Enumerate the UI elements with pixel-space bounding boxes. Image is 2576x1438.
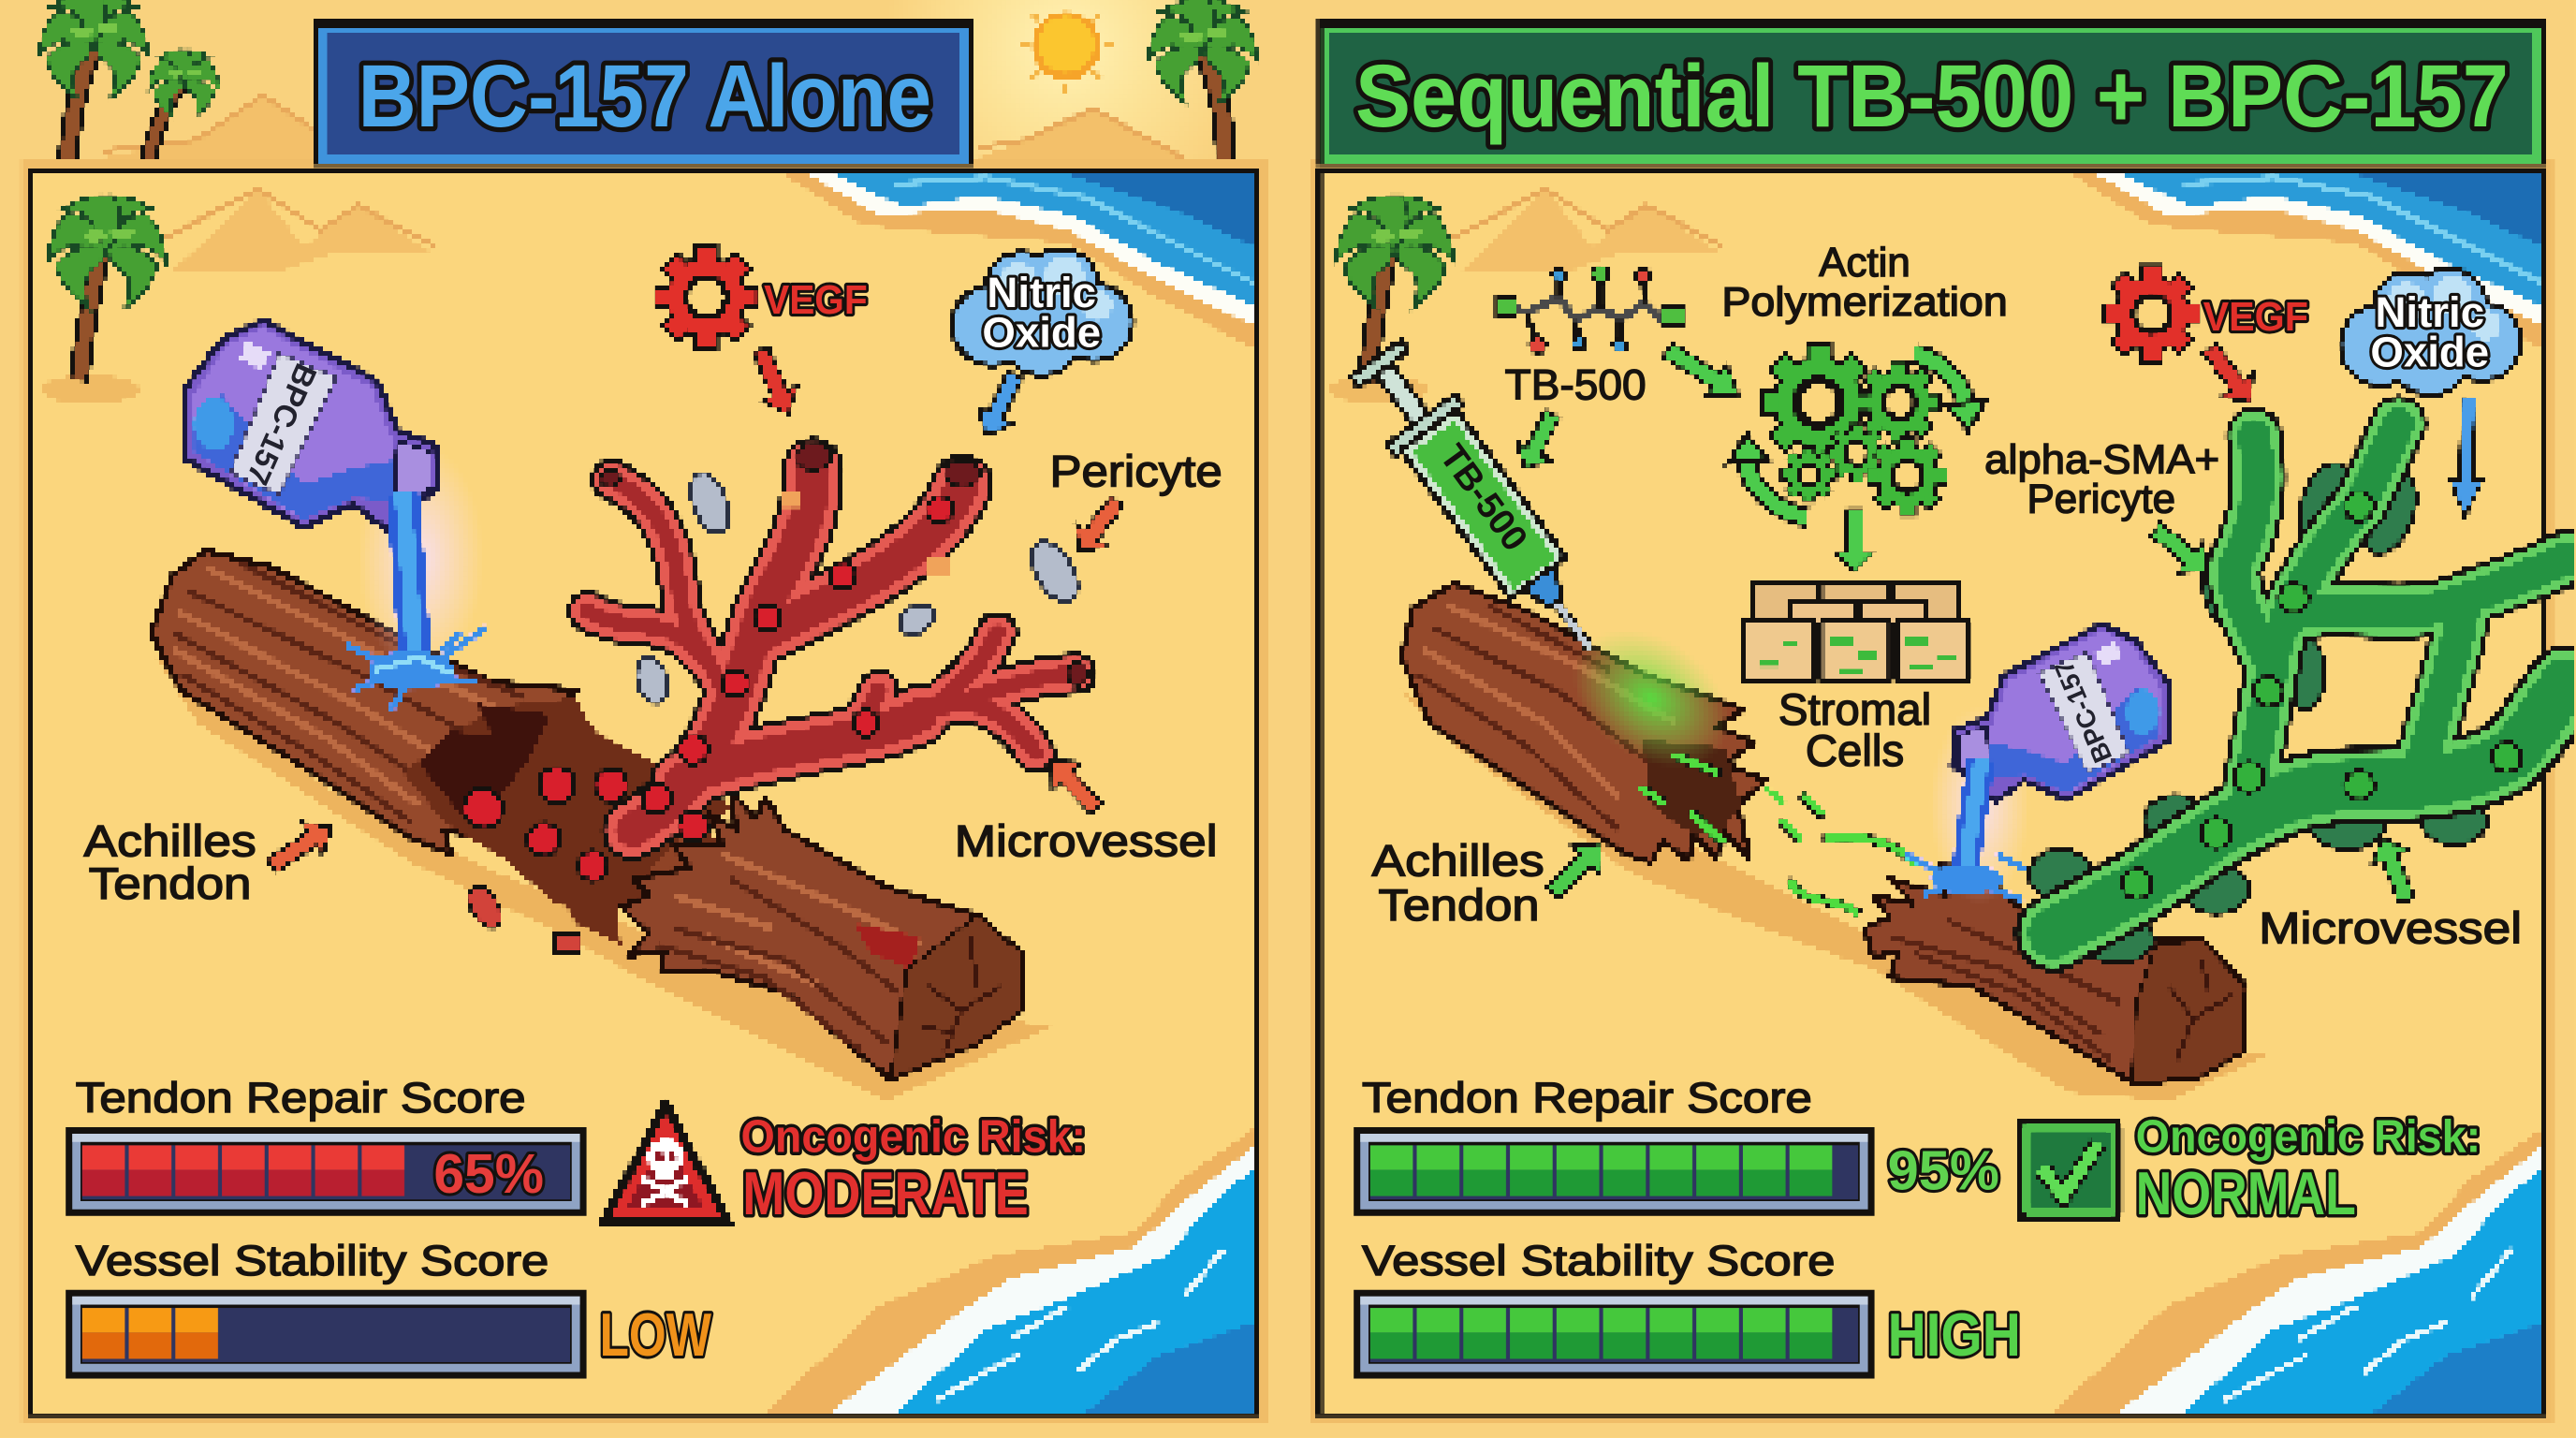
grey detached pericytes — [632, 468, 1087, 706]
vessel fragments — [461, 881, 580, 953]
arrow: curved clockwise right — [1914, 353, 1986, 431]
oncogenic risk normal: Oncogenic Risk: — [2136, 1111, 2481, 1162]
icon: palm tree left — [36, 0, 153, 161]
arrow: nitric oxide to vessel — [2449, 397, 2485, 518]
arrow: TB-500 to syringe — [1507, 405, 1570, 477]
panel: BPC-157 alone — [22, 157, 1266, 1425]
background dunes — [102, 95, 1183, 157]
icon: green check box — [2016, 1117, 2123, 1223]
title: BPC-157 alone: BPC-157 Alone — [359, 47, 931, 146]
heading: tendon repair score: Tendon Repair Score — [76, 1074, 526, 1122]
label: Achilles tendon: Achilles — [84, 816, 256, 866]
value: high: HIGH — [1888, 1300, 2021, 1369]
illustration: ruptured Achilles tendon, right part — [621, 792, 1022, 1079]
green actin strands in the gap — [1643, 756, 1914, 912]
icon: TB-500 syringe — [1341, 333, 1755, 796]
heading: tendon repair score: Tendon Repair Score — [1362, 1074, 1812, 1122]
panel: sequential TB-500 + BPC-157 — [1310, 157, 2566, 1425]
oncogenic risk normal — [2136, 1111, 2481, 1227]
oncogenic risk moderate: Oncogenic Risk: — [741, 1111, 1086, 1162]
label: stromal cells: Cells — [1806, 726, 1904, 776]
icon: TB-500 molecule — [1497, 266, 1686, 353]
title: sequential TB-500 + BPC-157: Sequential TB-500 + BPC-157 — [1355, 47, 2509, 146]
icon: nitric oxide cloud — [2338, 266, 2524, 398]
label: actin polymerization: Actin — [1819, 240, 1910, 286]
vial label text: BPC-157 — [2049, 656, 2117, 767]
arrow: VEGF to vessel — [742, 342, 807, 422]
vessel stability bar — [66, 1290, 587, 1379]
label: microvessel: Microvessel — [955, 816, 1218, 866]
label: stromal cells: Stromal — [1778, 685, 1931, 735]
arrow: Achilles tendon — [260, 810, 343, 883]
pericyte bumps — [2029, 456, 2512, 962]
label: TB-500: TB-500 — [1505, 360, 1647, 408]
label: Achilles tendon: Tendon — [1379, 881, 1540, 931]
value: 65%: 65% — [433, 1142, 544, 1205]
vessel stability bar — [1354, 1290, 1875, 1379]
arrow: microvessel — [1037, 747, 1112, 822]
arrow: pericyte — [2143, 514, 2219, 586]
tendon repair bar — [1354, 1127, 1875, 1216]
icon: palm tree right — [1144, 0, 1261, 161]
tendon sand shadow — [1401, 690, 2276, 1101]
illustration: tendon left part — [1401, 583, 1766, 862]
icon: nitric oxide cloud — [949, 246, 1135, 378]
tendon repair bar — [66, 1127, 587, 1216]
title: sequential TB-500 + BPC-157 — [1318, 20, 2545, 166]
icon: panel palm tree — [1329, 191, 1458, 404]
icon: BPC-157 vial — [184, 320, 487, 710]
tendon sand shadow — [156, 657, 1051, 1101]
label: microvessel: Microvessel — [2259, 903, 2522, 953]
arrow: TB-500 to gears — [1657, 333, 1749, 411]
label: Achilles tendon: Tendon — [89, 859, 252, 909]
arrow: VEGF to vessel — [2194, 336, 2266, 414]
red blood cells — [463, 496, 953, 881]
arrow: Achilles tendon — [1539, 829, 1616, 906]
label: Achilles tendon — [1372, 836, 1544, 931]
arrow: microvessel — [2364, 830, 2425, 908]
arrow: gears to stromal cells — [1835, 509, 1875, 572]
label: alpha-SMA+ pericyte: Pericyte — [2027, 477, 2175, 522]
label: VEGF: VEGF — [764, 277, 868, 323]
label: pericyte: Pericyte — [1050, 448, 1222, 497]
icon: panel palm tree — [41, 191, 170, 404]
arrow: nitric oxide to vessel — [968, 366, 1033, 444]
title: BPC-157 alone — [312, 20, 974, 166]
icon: sun — [1018, 0, 1116, 95]
illustration: tendon right part — [1865, 862, 2246, 1084]
value: low: LOW — [600, 1300, 712, 1369]
icon: warning triangle with skull — [601, 1101, 731, 1225]
icon: stromal cells — [1743, 583, 1969, 682]
heading: vessel stability score: Vessel Stability Score — [1362, 1237, 1835, 1284]
label: nitric oxide — [2370, 288, 2489, 375]
illustration: stabilised green microvessel — [2029, 424, 2566, 962]
icon: VEGF gear — [657, 248, 755, 346]
label: nitric oxide — [982, 269, 1101, 356]
oncogenic risk moderate — [741, 1111, 1086, 1227]
illustration: ruptured tendon gap — [402, 698, 731, 945]
icon: BPC-157 vial — [1906, 624, 2168, 903]
label: alpha-SMA+ pericyte: alpha-SMA+ — [1984, 436, 2219, 482]
label: nitric oxide: Nitric — [987, 269, 1096, 316]
oncogenic risk moderate: MODERATE — [742, 1159, 1029, 1227]
icon: VEGF gear — [2106, 268, 2198, 360]
label: stromal cells — [1778, 685, 1931, 776]
label: nitric oxide: Oxide — [2370, 328, 2489, 375]
label: actin polymerization — [1721, 240, 2008, 325]
heading: vessel stability score: Vessel Stability Score — [76, 1237, 549, 1284]
value: 95%: 95% — [1888, 1139, 1999, 1202]
icon: small palm tree — [146, 47, 222, 161]
arrow: curved clockwise left — [1728, 433, 1808, 518]
arrow: pericyte — [1063, 489, 1133, 563]
syringe label text: TB-500 — [1432, 437, 1535, 559]
illustration: ruptured Achilles tendon, left part — [151, 550, 583, 855]
label: nitric oxide: Oxide — [982, 308, 1101, 356]
oncogenic risk normal: NORMAL — [2136, 1159, 2356, 1227]
label: VEGF: VEGF — [2203, 294, 2308, 340]
label: Achilles tendon — [84, 816, 256, 909]
vial label text: BPC-157 — [239, 359, 323, 490]
illustration: broken red microvessel — [588, 444, 1088, 829]
label: Achilles tendon: Achilles — [1372, 836, 1544, 886]
label: nitric oxide: Nitric — [2375, 288, 2484, 336]
label: alpha-SMA+ pericyte — [1984, 436, 2219, 522]
icon: actin gears — [1763, 346, 1945, 514]
vessel dots — [2123, 492, 2522, 899]
label: actin polymerization: Polymerization — [1721, 279, 2008, 325]
